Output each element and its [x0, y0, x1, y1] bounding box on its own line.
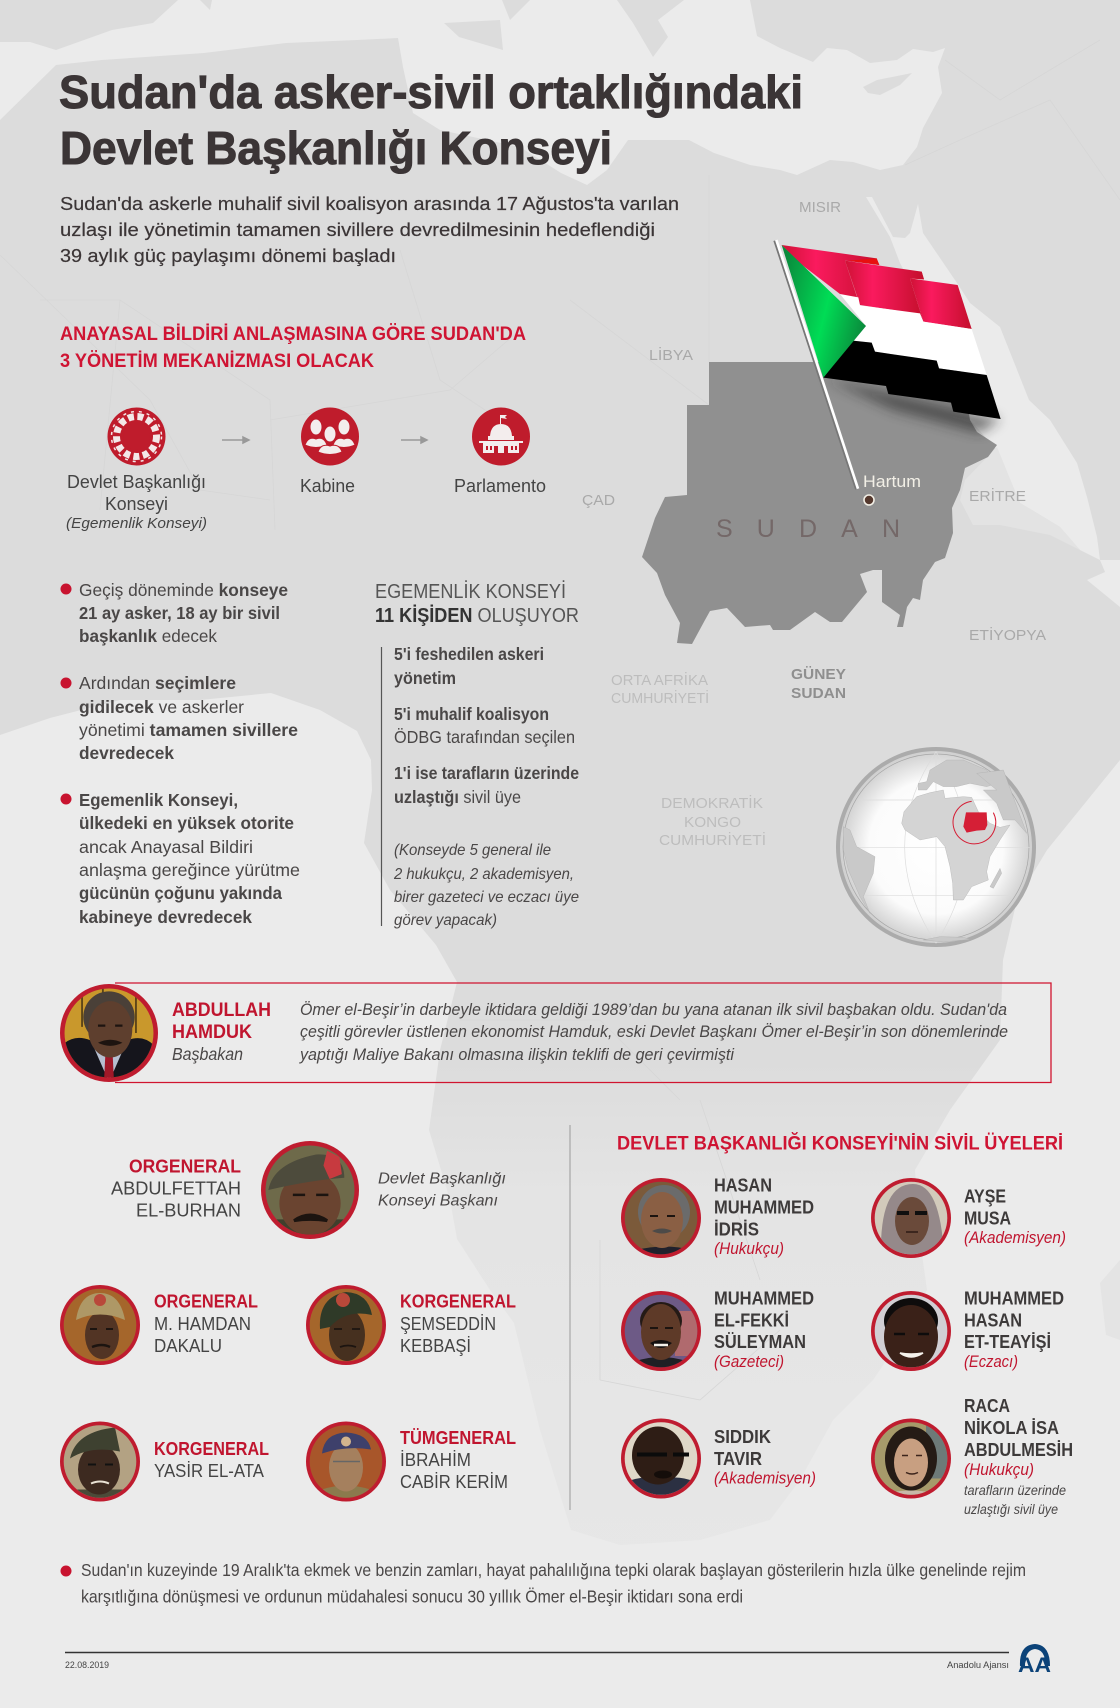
member: Burhan	[111, 1141, 506, 1239]
member: Raca Nikola İsa Abdulmesih: uzlaştığı sivil üye	[964, 1501, 1058, 1517]
member: Hasan Muhammed İdris	[621, 1176, 814, 1258]
member: Dakalu: DAKALU	[154, 1336, 222, 1356]
member: Yasir El-Ata	[60, 1422, 269, 1502]
bullet list	[60, 580, 300, 927]
label: Devlet Başkanlığı Konseyi: (Egemenlik Konseyi)	[66, 515, 207, 532]
bullet 1: Geçiş döneminde konseye	[79, 580, 288, 600]
bullet 3: anlaşma gereğince yürütme	[79, 860, 300, 880]
heading: three mechanisms: ANAYASAL BİLDİRİ ANLAŞMASINA GÖRE SUDAN'DA	[60, 322, 526, 345]
map country labels: ETİYOPYA	[969, 626, 1046, 644]
bullet 3	[60, 790, 300, 927]
heading: three mechanisms: 3 YÖNETİM MEKANİZMASI OLACAK	[60, 349, 374, 372]
intro text: uzlaşı ile yönetimin tamamen sivillere devredilmesinin hedeflendiği	[60, 219, 655, 240]
composition list: 1'i ise tarafların üzerinde	[394, 763, 579, 783]
member: Dakalu: M. HAMDAN	[154, 1314, 251, 1334]
member: Kebbaşi	[306, 1285, 516, 1365]
map country labels: MISIR	[799, 199, 841, 216]
member: Kebbaşi: ŞEMSEDDİN	[400, 1314, 496, 1334]
biography: Ömer el-Beşir’in darbeyle iktidara geldiği 1989’dan bu yana atanan ilk sivil başbakan oldu. Sudan'da	[300, 1001, 1007, 1019]
footer: 22.08.2019	[65, 1660, 109, 1670]
label: Devlet Başkanlığı Konseyi	[66, 472, 207, 532]
globe locator	[836, 747, 1036, 947]
member: Raca Nikola İsa Abdulmesih: tarafların üzerinde	[964, 1482, 1066, 1498]
member: Raca Nikola İsa Abdulmesih: (Hukukçu)	[964, 1461, 1034, 1479]
member: Raca Nikola İsa Abdulmesih: RACA	[964, 1396, 1010, 1416]
member: Burhan: ORGENERAL	[129, 1156, 241, 1176]
member: Kebbaşi: KORGENERAL	[400, 1290, 516, 1312]
composition list: uzlaştığı sivil üye	[394, 787, 521, 807]
member: Kebbaşi: KEBBAŞİ	[400, 1336, 471, 1356]
composition list: 5'i feshedilen askeri	[394, 644, 544, 664]
member: Muhammed El-Fekki Süleyman: EL-FEKKİ	[714, 1310, 789, 1330]
bullet 1: 21 ay asker, 18 ay bir sivil	[79, 603, 280, 623]
logo: Anadolu Ajansı	[1018, 1644, 1051, 1677]
portrait: Hamduk	[60, 984, 158, 1082]
intro text: 39 aylık güç paylaşımı dönemi başladı	[60, 245, 396, 266]
member: Cabir Kerim: CABİR KERİM	[400, 1472, 508, 1492]
map country labels: ÇAD	[582, 492, 615, 509]
member: Cabir Kerim: TÜMGENERAL	[400, 1427, 516, 1448]
member: Muhammed El-Fekki Süleyman: (Gazeteci)	[714, 1353, 784, 1371]
heading: DEVLET BAŞKANLIĞI KONSEYİ'NİN SİVİL ÜYELERİ	[617, 1132, 1063, 1154]
biography: yaptığı Maliye Bakanı olmasına ilişkin teklifi de geri çevirmişti	[299, 1046, 735, 1064]
map country labels: GÜNEY	[791, 666, 846, 683]
member: Burhan: EL-BURHAN	[136, 1200, 241, 1220]
name: HAMDUK	[172, 1022, 252, 1043]
member: Ayşe Musa: (Akademisyen)	[964, 1229, 1066, 1247]
map country labels: LİBYA	[649, 346, 693, 364]
member: Hasan Muhammed İdris: MUHAMMED	[714, 1198, 814, 1218]
footer	[65, 1644, 1051, 1677]
arrow	[401, 437, 427, 443]
member: Hasan Muhammed İdris: (Hukukçu)	[714, 1240, 784, 1258]
member: Muhammed Hasan Et-Teayişi: ET-TEAYİŞİ	[964, 1332, 1051, 1352]
heading: EGEMENLİK KONSEYİ	[375, 580, 566, 603]
map country labels: SUDAN	[791, 685, 846, 702]
note: (Konseyde 5 general ile	[394, 842, 551, 859]
footer note	[60, 1560, 1026, 1606]
note: 2 hukukçu, 2 akademisyen,	[393, 866, 574, 883]
biography: çeşitli görevler üstlenen ekonomist Hamduk, eski Devlet Başkanı Ömer el-Beşir’in son dönemlerinde	[300, 1023, 1008, 1041]
title	[59, 66, 803, 174]
bullet 2	[60, 673, 298, 763]
member: Muhammed Hasan Et-Teayişi: MUHAMMED	[964, 1288, 1064, 1308]
map country labels: KONGO	[684, 814, 741, 831]
note: birer gazeteci ve eczacı üye	[394, 889, 579, 906]
name: Başbakan	[172, 1044, 243, 1064]
note: görev yapacak)	[394, 912, 497, 929]
member: Burhan: ABDULFETTAH	[111, 1178, 241, 1198]
bullet 2: Ardından seçimlere	[79, 673, 236, 693]
panel: military members	[60, 1141, 516, 1502]
flag of Sudan with pole	[774, 240, 1001, 489]
bullet 2: devredecek	[79, 743, 174, 763]
arrow	[222, 437, 249, 443]
bullet 3: kabineye devredecek	[79, 907, 252, 927]
bullet 3: ancak Anayasal Bildiri	[79, 837, 253, 857]
panel: Egemenlik Konseyi	[375, 580, 579, 929]
map country labels: ERİTRE	[969, 487, 1026, 505]
member: Raca Nikola İsa Abdulmesih: NİKOLA İSA	[964, 1418, 1059, 1438]
bullet 3: gücünün çoğunu yakında	[79, 883, 282, 903]
composition list	[394, 644, 579, 807]
title: Sudan'da asker-sivil ortaklığındaki	[59, 66, 803, 118]
name: ABDULLAH	[172, 1000, 271, 1021]
member: Dakalu: ORGENERAL	[154, 1290, 258, 1312]
intro text	[60, 193, 679, 266]
member: Sıddık Tavır: SIDDIK	[714, 1427, 771, 1447]
member: Hasan Muhammed İdris: İDRİS	[714, 1220, 759, 1240]
map country labels: CUMHURİYETİ	[611, 689, 709, 707]
member: Ayşe Musa: MUSA	[964, 1208, 1011, 1228]
member: Muhammed Hasan Et-Teayişi	[871, 1288, 1064, 1371]
bullet 2: yönetimi tamamen sivillere	[79, 720, 298, 740]
composition list: 5'i muhalif koalisyon	[394, 704, 549, 724]
marker: Hartum: Hartum	[863, 472, 921, 491]
map country labels: DEMOKRATİK	[661, 794, 763, 812]
member: Raca Nikola İsa Abdulmesih: ABDULMESİH	[964, 1440, 1073, 1460]
member: Sıddık Tavır: (Akademisyen)	[714, 1470, 816, 1488]
heading: 11 KİŞİDEN OLUŞUYOR	[375, 604, 579, 627]
map label: SUDAN: SUDAN	[716, 515, 900, 543]
member: Muhammed El-Fekki Süleyman	[621, 1288, 814, 1371]
biography	[299, 1001, 1008, 1064]
member: Hasan Muhammed İdris: HASAN	[714, 1176, 772, 1196]
heading	[375, 580, 579, 627]
composition list: ÖDBG tarafından seçilen	[394, 727, 575, 747]
map: Sudan	[642, 362, 997, 644]
member: Yasir El-Ata: YASİR EL-ATA	[154, 1461, 264, 1481]
title: Devlet Başkanlığı Konseyi	[60, 122, 612, 174]
composition list: yönetim	[394, 668, 456, 688]
bullet 1	[60, 580, 288, 646]
panel: civilian members	[617, 1132, 1073, 1517]
bullet 3: Egemenlik Konseyi,	[79, 790, 238, 810]
member: Muhammed Hasan Et-Teayişi: HASAN	[964, 1310, 1022, 1330]
member: Raca Nikola İsa Abdulmesih	[871, 1396, 1073, 1517]
member: Sıddık Tavır	[621, 1418, 816, 1498]
bullet 2: gidilecek ve askerler	[79, 697, 244, 717]
bullet 3: ülkedeki en yüksek otorite	[79, 813, 294, 833]
panel: Abdullah Hamduk	[60, 983, 1051, 1082]
member: Burhan: Devlet Başkanlığı	[378, 1170, 506, 1188]
intro text: Sudan'da askerle muhalif sivil koalisyon arasında 17 Ağustos'ta varılan	[60, 193, 679, 214]
note	[393, 842, 579, 929]
member: Burhan: Konseyi Başkanı	[378, 1192, 498, 1210]
label: Kabine: Kabine	[300, 476, 355, 496]
member: Muhammed Hasan Et-Teayişi: (Eczacı)	[964, 1353, 1018, 1371]
member: Ayşe Musa	[871, 1178, 1066, 1258]
member: Muhammed El-Fekki Süleyman: SÜLEYMAN	[714, 1332, 806, 1352]
name	[172, 1000, 271, 1064]
member: Ayşe Musa: AYŞE	[964, 1186, 1006, 1206]
map country labels	[582, 199, 1046, 849]
logo: Anadolu Ajansı: AA	[1018, 1654, 1051, 1677]
member: Cabir Kerim: İBRAHİM	[400, 1450, 471, 1470]
icon: parliament building	[472, 408, 530, 466]
footer note: karşıtlığına dönüşmesi ve ordunun müdahalesi sonucu 30 yıllık Ömer el-Beşir iktidarı sona erdi	[81, 1586, 743, 1606]
icon: cabinet people	[301, 408, 359, 466]
map country labels: ORTA AFRİKA	[611, 671, 708, 689]
bullet 1: başkanlık edecek	[79, 626, 217, 646]
icon: council round table	[108, 408, 166, 466]
label: Devlet Başkanlığı Konseyi: Devlet Başkanlığı	[67, 472, 206, 492]
label: Devlet Başkanlığı Konseyi: Konseyi	[105, 494, 168, 514]
footer: Anadolu Ajansı	[947, 1660, 1009, 1671]
member: Muhammed El-Fekki Süleyman: MUHAMMED	[714, 1288, 814, 1308]
label: Parlamento: Parlamento	[454, 476, 546, 496]
member: Dakalu	[60, 1285, 258, 1365]
heading: three mechanisms	[60, 322, 526, 372]
member: Yasir El-Ata: KORGENERAL	[154, 1438, 269, 1459]
map country labels: CUMHURİYETİ	[659, 831, 766, 849]
marker: Hartum	[863, 472, 921, 505]
member: Sıddık Tavır: TAVIR	[714, 1449, 762, 1469]
footer note: Sudan'ın kuzeyinde 19 Aralık'ta ekmek ve benzin zamları, hayat pahalılığına tepki olarak başlayan gösterilerin hızla ülke genelinde rejim	[81, 1560, 1026, 1580]
member: Cabir Kerim	[306, 1422, 516, 1502]
